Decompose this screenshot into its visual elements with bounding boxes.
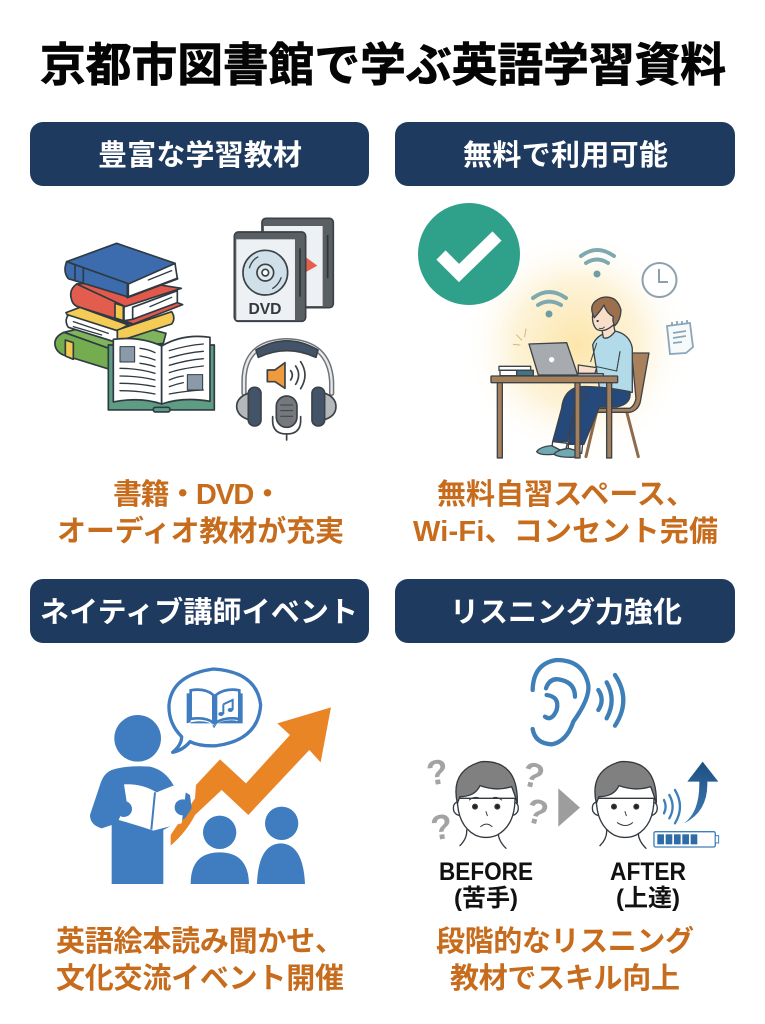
panel: rich materials — [30, 122, 369, 548]
icon: teacher with children and growth arrow — [90, 669, 331, 884]
text block: free to use: 無料自習スペース、 — [437, 478, 695, 511]
text block: native instructor events — [56, 925, 344, 995]
heading: native instructor events: ネイティブ講師イベント — [40, 595, 358, 629]
label: before — [439, 858, 533, 912]
heading: rich materials — [30, 122, 369, 186]
icon: glow background — [462, 230, 692, 460]
text block: free to use — [413, 478, 718, 548]
icon: after face — [592, 762, 657, 848]
icon: open book — [108, 336, 214, 412]
heading: free to use — [395, 122, 735, 186]
icon: stack of books — [55, 243, 214, 412]
icon: question marks: ? — [428, 807, 455, 848]
heading: rich materials: 豊富な学習教材 — [98, 139, 302, 172]
panel: native instructor events — [30, 579, 369, 995]
label: after — [610, 858, 686, 912]
icon: ear with sound waves — [533, 660, 623, 744]
icon: question marks — [424, 752, 552, 848]
arrow: growth — [171, 707, 331, 846]
text block: listening improvement — [436, 925, 694, 995]
text block: rich materials — [57, 478, 344, 548]
title: 京都市図書館で学ぶ英語学習資料 — [40, 39, 726, 91]
icon: notepad — [667, 320, 693, 354]
icon: question marks: ? — [518, 754, 548, 797]
icon: check badge — [418, 203, 520, 305]
icon: sound waves and rising arrow — [664, 762, 718, 823]
icon: DVD cases — [234, 218, 333, 321]
text block: rich materials: 書籍・DVD・ — [113, 478, 282, 511]
icon: clock — [642, 263, 676, 297]
text block: rich materials: オーディオ教材が充実 — [57, 514, 344, 548]
icon: battery — [654, 832, 719, 847]
arrow: before to after — [558, 788, 580, 827]
heading: native instructor events — [30, 579, 369, 643]
icon: person at desk — [491, 297, 649, 458]
label: before: BEFORE — [439, 858, 533, 886]
text block: free to use: Wi-Fi、コンセント完備 — [413, 515, 718, 548]
text block: listening improvement: 段階的なリスニング — [436, 925, 694, 958]
icon: before face — [453, 762, 518, 848]
icon: children — [191, 807, 305, 884]
heading: listening improvement — [395, 579, 735, 643]
icon: question marks: ? — [522, 791, 552, 834]
icon: question marks: ? — [424, 752, 451, 794]
panel: listening improvement — [395, 579, 735, 995]
text block: listening improvement: 教材でスキル向上 — [450, 962, 680, 995]
heading: listening improvement: リスニング力強化 — [450, 596, 682, 629]
heading: free to use: 無料で利用可能 — [463, 139, 668, 172]
text block: native instructor events: 英語絵本読み聞かせ、 — [56, 925, 344, 958]
icon: speech bubble with book — [169, 669, 261, 752]
icon: headphones and microphone — [237, 341, 336, 440]
icon: wifi signals — [533, 250, 614, 318]
icon: teacher — [90, 715, 192, 884]
panel: free to use — [395, 122, 735, 548]
label: after: AFTER — [610, 858, 686, 886]
label: before: (苦手) — [454, 885, 518, 912]
label: after: (上達) — [616, 885, 680, 912]
text block: native instructor events: 文化交流イベント開催 — [56, 962, 344, 995]
icon: DVD cases: DVD — [248, 301, 282, 318]
